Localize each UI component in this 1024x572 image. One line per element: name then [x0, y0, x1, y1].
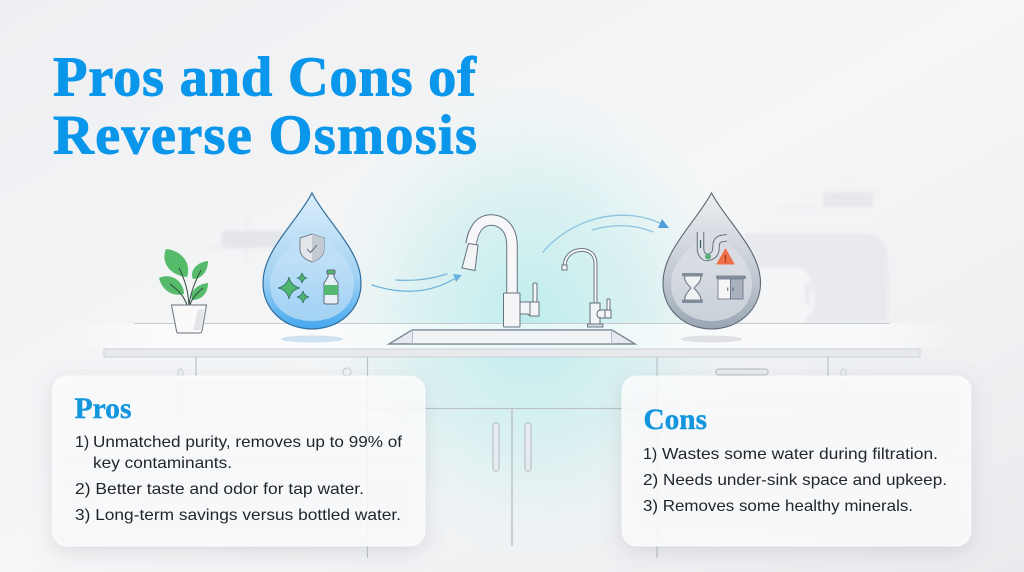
cons list: [643, 446, 947, 515]
pros list: [75, 434, 403, 524]
arrow: faucet to cons drop: [543, 215, 669, 252]
drop body: cons: [663, 193, 760, 329]
icon: warning triangle: !: [724, 254, 727, 266]
drop inner highlight: pros: [270, 225, 354, 321]
background: wall shelves and appliance silhouettes: [203, 178, 888, 323]
cons list: 1): [643, 446, 657, 463]
pros list: 3) Long-term savings versus bottled water.: [75, 507, 401, 524]
pros list: 2) Better taste and odor for tap water.: [75, 481, 364, 498]
pros list: key contaminants.: [93, 455, 232, 472]
panel: cons: [622, 376, 971, 546]
icon: potted plant: [159, 249, 208, 333]
cons list: 3) Removes some healthy minerals.: [643, 498, 913, 515]
pros water drop: [263, 193, 361, 342]
drop body: pros: [263, 193, 361, 329]
panel: pros: [52, 376, 425, 546]
pros list: 1): [75, 434, 89, 451]
icon: small filtered water faucet: [562, 250, 611, 327]
icon: main kitchen faucet: [462, 220, 539, 327]
sink basin: [389, 330, 635, 344]
cons list: Wastes some water during filtration.: [662, 446, 938, 463]
pros list: Unmatched purity, removes up to 99% of: [93, 434, 403, 451]
under-sink cabinets: [178, 357, 846, 558]
icon: shield with check: [300, 234, 324, 262]
icon: leaking pipe: [700, 232, 727, 260]
arrow: pros drop to faucet: [372, 274, 462, 291]
icon: water bottle: [324, 270, 338, 304]
icon: warning triangle: [717, 249, 734, 266]
icon: hourglass: [682, 273, 703, 303]
cons list: 2) Needs under-sink space and upkeep.: [643, 472, 947, 489]
heading: cons: Cons: [644, 404, 707, 436]
heading: pros: Pros: [74, 393, 132, 425]
icon: sparkles: [278, 273, 309, 303]
title: [53, 46, 477, 166]
kitchen counter: [60, 323, 960, 357]
drop inner highlight: cons: [671, 225, 752, 321]
icon: cabinet: [716, 276, 746, 299]
drop shadow: pros: [281, 336, 343, 342]
title: Reverse Osmosis: [53, 104, 477, 166]
drop shadow: cons: [680, 336, 742, 342]
cons water drop: [663, 193, 760, 342]
title: Pros and Cons of: [53, 46, 477, 108]
